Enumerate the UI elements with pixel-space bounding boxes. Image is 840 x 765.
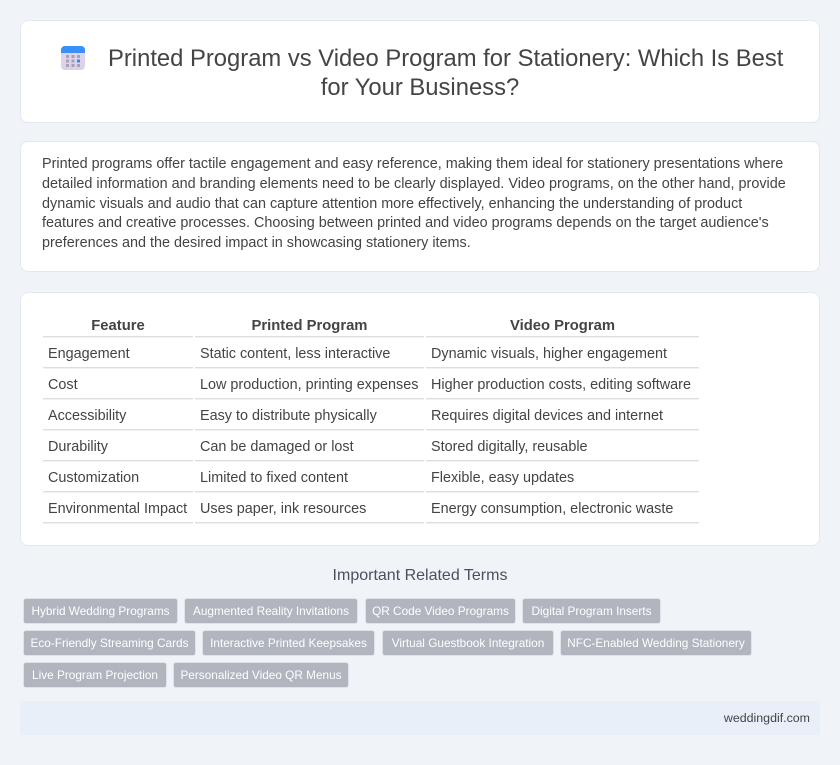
footer bar <box>20 701 820 735</box>
comparison table: Easy to distribute physically <box>200 408 377 424</box>
comparison table: Dynamic visuals, higher engagement <box>431 346 667 362</box>
related term tags <box>23 598 752 688</box>
tag <box>522 598 661 624</box>
comparison table: Feature <box>91 318 145 334</box>
intro paragraph: dynamic visuals and audio that can capture attention more effectively, enhancing the understanding of product <box>42 196 742 212</box>
panel: intro text <box>20 141 820 272</box>
comparison table: Uses paper, ink resources <box>200 501 366 517</box>
comparison table: Cost <box>48 377 78 393</box>
comparison table: Limited to fixed content <box>200 470 348 486</box>
tag <box>23 630 196 656</box>
title: Printed Program vs Video Program for Stationery: Which Is Best <box>108 45 783 72</box>
tag: Live Program Projection <box>32 668 158 682</box>
tag: QR Code Video Programs <box>372 604 509 618</box>
comparison table: Environmental Impact <box>48 501 187 517</box>
comparison table: Higher production costs, editing software <box>431 377 691 393</box>
panel: comparison table <box>20 292 820 546</box>
intro paragraph: preferences and the desired impact in showcasing stationery items. <box>42 235 471 251</box>
tag: Digital Program Inserts <box>532 604 651 618</box>
comparison table: Engagement <box>48 346 130 362</box>
tag <box>560 630 752 656</box>
comparison table: Energy consumption, electronic waste <box>431 501 673 517</box>
row: Environmental Impact <box>43 501 699 524</box>
comparison table: Static content, less interactive <box>200 346 390 362</box>
comparison table: Requires digital devices and internet <box>431 408 663 424</box>
tag: Interactive Printed Keepsakes <box>210 636 367 650</box>
comparison table: Durability <box>48 439 108 455</box>
tag: Hybrid Wedding Programs <box>31 604 170 618</box>
intro paragraph <box>42 156 786 251</box>
tag <box>173 662 349 688</box>
title <box>108 45 784 101</box>
tag: Virtual Guestbook Integration <box>392 636 544 650</box>
heading: related terms: Important Related Terms <box>333 567 507 584</box>
comparison table <box>43 318 699 524</box>
comparison table: Low production, printing expenses <box>200 377 418 393</box>
tag <box>365 598 516 624</box>
icon: calendar <box>61 46 85 70</box>
comparison table: Customization <box>48 470 139 486</box>
row: Engagement <box>43 346 699 369</box>
tag: Personalized Video QR Menus <box>180 668 342 682</box>
comparison table: Printed Program <box>252 318 367 334</box>
comparison table: Video Program <box>510 318 615 334</box>
tag <box>382 630 554 656</box>
tag: Eco-Friendly Streaming Cards <box>30 636 188 650</box>
intro paragraph: Printed programs offer tactile engagement and easy reference, making them ideal for stationery presentations where <box>42 156 783 172</box>
tag <box>23 662 167 688</box>
intro paragraph: features and creative processes. Choosing between printed and video programs depends on the target audience's <box>42 215 769 231</box>
intro paragraph: detailed information and branding elements need to be clearly displayed. Video programs, on the other hand, provide <box>42 176 786 192</box>
table header <box>43 318 699 338</box>
header panel <box>20 20 820 123</box>
comparison table: Can be damaged or lost <box>200 439 354 455</box>
comparison table: Accessibility <box>48 408 126 424</box>
row: Durability <box>43 439 699 462</box>
comparison table: Stored digitally, reusable <box>431 439 588 455</box>
tag <box>184 598 358 624</box>
footer source text: weddingdif.com <box>724 711 810 725</box>
row: Accessibility <box>43 408 699 431</box>
row: Customization <box>43 470 699 493</box>
tag <box>23 598 178 624</box>
tag <box>202 630 375 656</box>
comparison table: Flexible, easy updates <box>431 470 574 486</box>
title: for Your Business? <box>321 74 519 101</box>
row: Cost <box>43 377 699 400</box>
tag: Augmented Reality Invitations <box>193 604 349 618</box>
tag: NFC-Enabled Wedding Stationery <box>567 636 745 650</box>
